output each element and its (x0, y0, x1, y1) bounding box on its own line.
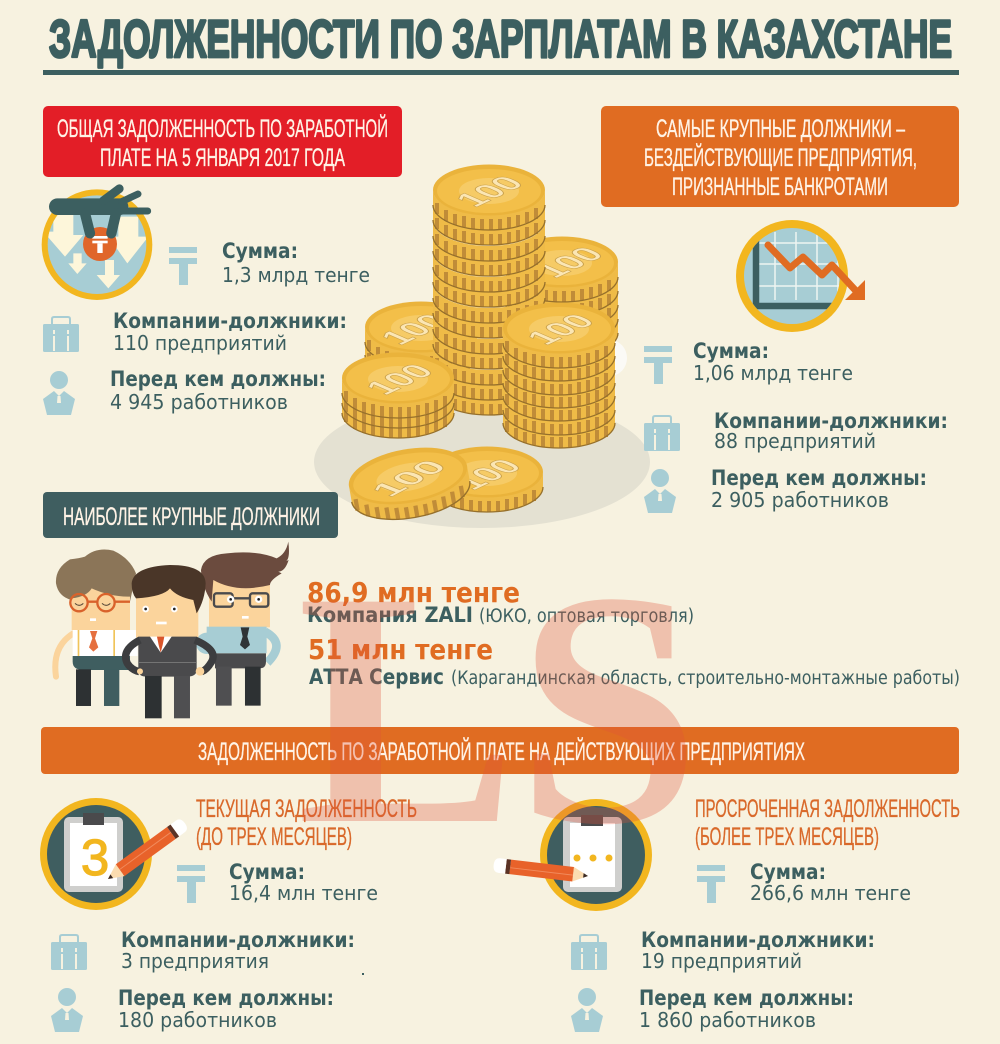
block: bankrupt amount: Сумма: (693, 339, 769, 363)
block: total debtor companies (43, 309, 347, 355)
block: overdue debt amount: 266,6 млн тенге (750, 881, 911, 905)
illustration: coin stacks: 100 (527, 243, 613, 282)
block: total debtor companies: Компании-должники: (113, 309, 347, 333)
block: debtor ATTA Servis: 51 млн тенге (308, 633, 493, 666)
icon: hand holding tenge coin (42, 189, 152, 300)
panel: total debt heading: ОБЩАЯ ЗАДОЛЖЕННОСТЬ ПО ЗАРАБОТНОЙ (57, 113, 388, 143)
heading: current debt (196, 795, 417, 851)
block: debtor ZALI: 86,9 млн тенге (307, 576, 520, 609)
block: current debt amount (177, 860, 378, 905)
heading: largest debtors (43, 492, 338, 538)
block: total workers owed: 4 945 работников (110, 390, 288, 414)
block: overdue debt amount (697, 860, 911, 905)
panel: total debt heading (43, 106, 402, 177)
illustration: coin stacks: 100 (518, 310, 604, 349)
heading: current debt: ТЕКУЩАЯ ЗАДОЛЖЕННОСТЬ (196, 795, 417, 823)
icon: clipboard with dots and pencil (493, 799, 652, 911)
watermark: LS: LS (297, 523, 700, 894)
block: debtor ATTA Servis: АТТА Сервис (309, 665, 444, 689)
block: current debt workers: Перед кем должны: (118, 986, 334, 1010)
heading: largest debtors: НАИБОЛЕЕ КРУПНЫЕ ДОЛЖНИКИ (63, 503, 320, 531)
block: bankrupt amount (644, 339, 853, 385)
block: bankrupt companies: 88 предприятий (714, 429, 876, 453)
heading: current debt: (ДО ТРЕХ МЕСЯЦЕВ) (196, 823, 352, 851)
icon: clipboard with 3 and pencil: 3 (81, 829, 109, 886)
block: total debt amount: Сумма: (222, 239, 298, 263)
block: overdue debt companies: Компании-должники: (641, 928, 875, 952)
block: current debt workers: 180 работников (118, 1008, 277, 1032)
icon: clipboard with 3 and pencil (40, 798, 189, 910)
block: bankrupt companies: Компании-должники: (714, 409, 948, 433)
block: overdue debt workers (571, 986, 854, 1032)
block: overdue debt workers: 1 860 работников (639, 1008, 816, 1032)
block: total debt amount (169, 239, 370, 287)
block: debtor ZALI (307, 576, 694, 627)
panel: total debt heading: ПЛАТЕ НА 5 ЯНВАРЯ 2017 ГОДА (100, 144, 345, 172)
block: bankrupt workers owed (644, 466, 927, 513)
illustration: coin stacks (314, 164, 650, 528)
heading: overdue debt: (БОЛЕЕ ТРЕХ МЕСЯЦЕВ) (695, 823, 879, 851)
icon: falling chart (736, 220, 865, 332)
block: debtor ZALI: (ЮКО, оптовая торговля) (479, 606, 694, 627)
heading: overdue debt (695, 795, 960, 851)
illustration: coin stacks: 100 (447, 172, 533, 211)
block: current debt amount: 16,4 млн тенге (229, 881, 378, 905)
block: bankrupt amount: 1,06 млрд тенге (693, 361, 853, 385)
block: total debt amount: 1,3 млрд тенге (222, 263, 370, 287)
block: current debt companies: 3 предприятия (121, 949, 269, 973)
panel: largest debtors heading (601, 106, 959, 207)
block: bankrupt workers owed: 2 905 работников (711, 488, 889, 512)
illustration: three businessmen (55, 542, 289, 718)
block: bankrupt companies (644, 409, 948, 453)
block: current debt companies: Компании-должники: (121, 928, 355, 952)
block: total workers owed: Перед кем должны: (110, 367, 326, 391)
block: bankrupt workers owed: Перед кем должны: (711, 466, 927, 490)
band: active enterprises heading (41, 727, 959, 774)
block: overdue debt companies (571, 928, 875, 973)
block: total workers owed (43, 367, 326, 415)
block: overdue debt amount: Сумма: (750, 860, 826, 884)
block: debtor ZALI: Компания ZALI (307, 603, 473, 627)
block: current debt amount: Сумма: (229, 860, 305, 884)
block: overdue debt companies: 19 предприятий (641, 949, 802, 973)
block: total debtor companies: 110 предприятий (113, 331, 287, 355)
illustration: coin stacks: 100 (362, 456, 455, 500)
illustration: coin stacks: 100 (357, 360, 443, 399)
block: overdue debt workers: Перед кем должны: (639, 986, 854, 1010)
illustration: coin stacks: 100 (372, 310, 458, 349)
illustration: coin stacks: 100 (445, 455, 531, 494)
block: current debt workers (51, 986, 334, 1032)
block: debtor ATTA Servis (308, 633, 960, 689)
block: current debt companies (51, 928, 355, 973)
icon: stray dot (362, 973, 364, 975)
